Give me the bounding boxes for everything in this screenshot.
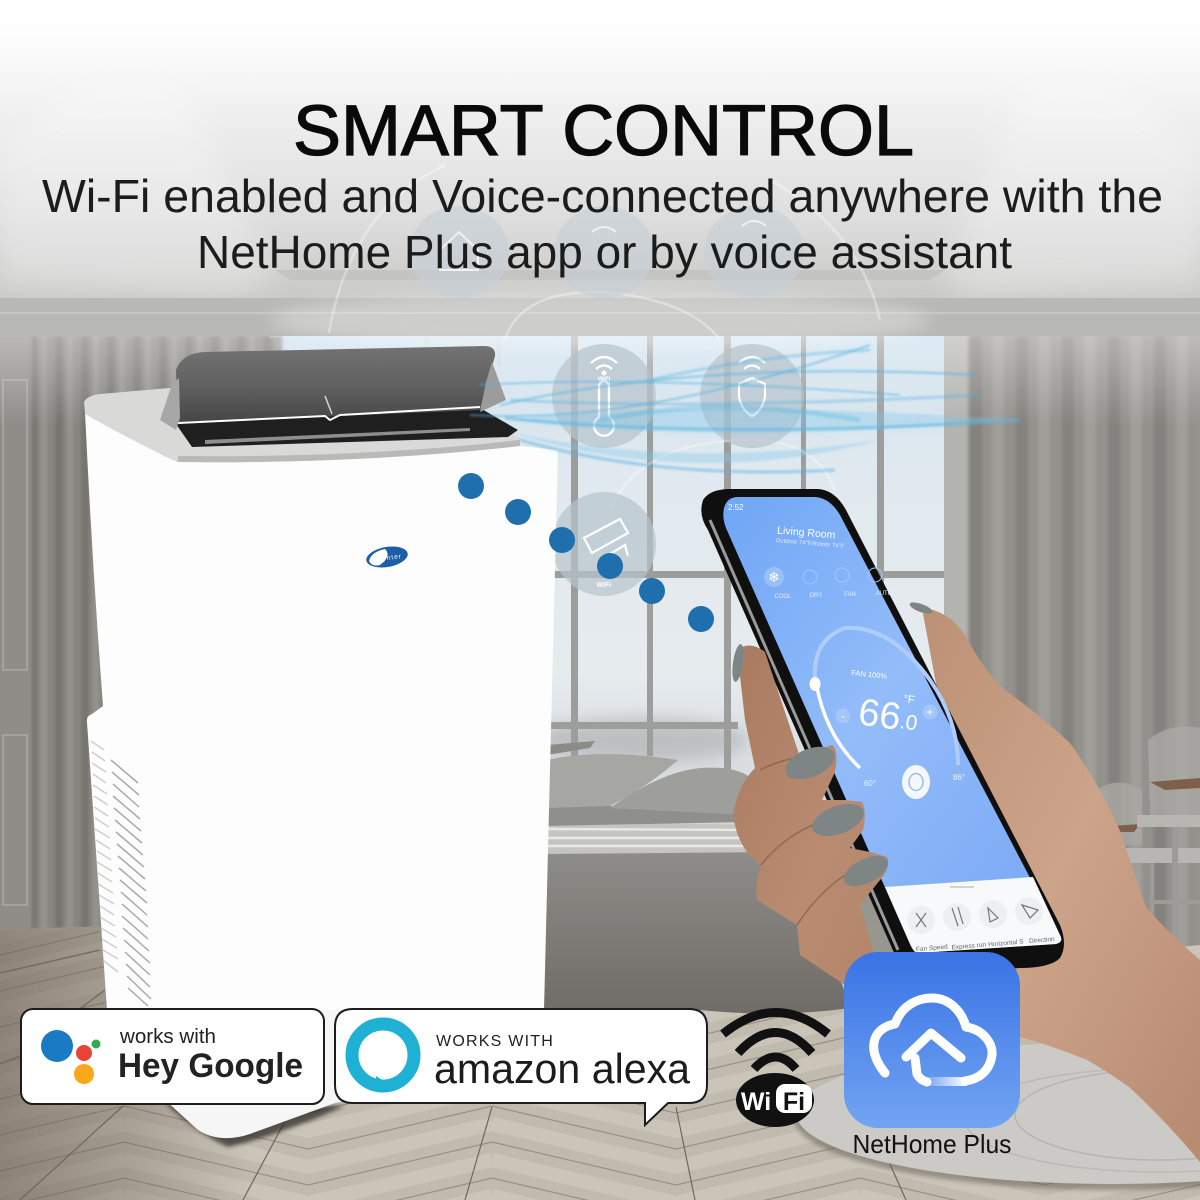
brand logo bbox=[365, 544, 409, 570]
front body with rear panel bbox=[85, 412, 558, 1010]
rug bbox=[794, 1042, 1200, 1190]
shadow bbox=[165, 1103, 345, 1147]
temperature dial: + bbox=[926, 705, 934, 719]
badge: amazon alexa: amazon alexa bbox=[434, 1045, 691, 1092]
subtitle: NetHome Plus app or by voice assistant bbox=[197, 226, 1012, 278]
smartphone bbox=[701, 489, 1064, 975]
app name label: NetHome Plus bbox=[852, 1129, 1012, 1159]
gripping fingers bbox=[733, 645, 888, 985]
power button bbox=[902, 765, 930, 799]
rear vent bbox=[91, 741, 151, 1006]
bottom tray: Horizontal S bbox=[988, 938, 1024, 949]
icon: wifi logo: Fi bbox=[783, 1088, 805, 1116]
fingers holding phone bbox=[730, 643, 893, 985]
translucent feature circles bbox=[329, 165, 880, 596]
temperature dial bbox=[810, 628, 965, 799]
temperature dial: 66 bbox=[856, 691, 903, 739]
cloud house glyph bbox=[874, 998, 992, 1082]
badge: hey google: works with bbox=[119, 1026, 216, 1048]
mode selector: COOL bbox=[774, 594, 792, 600]
icon: wifi thermometer: WiFi bbox=[598, 377, 611, 383]
bottom tray: Fan Speed bbox=[916, 944, 948, 953]
air flow wisps bbox=[470, 345, 1020, 472]
temperature dial: FAN 100% bbox=[851, 668, 888, 681]
nail ring bbox=[839, 850, 893, 892]
badge: hey google bbox=[21, 1009, 324, 1104]
mode selector: ❄ bbox=[768, 569, 780, 585]
connection dots bbox=[458, 473, 714, 632]
icon: wifi logo bbox=[723, 1012, 828, 1127]
subtitle bbox=[42, 170, 1163, 278]
bottom tray bbox=[885, 877, 1061, 953]
icon: google assistant dots bbox=[41, 1030, 100, 1084]
mode selector bbox=[764, 567, 893, 600]
temperature dial: 86° bbox=[953, 773, 965, 782]
mode selector: AUTO bbox=[876, 591, 893, 597]
screen status and title: Living Room bbox=[777, 524, 836, 542]
icon: wifi camera bbox=[552, 492, 656, 596]
hand back behind phone bbox=[900, 600, 1200, 1162]
bottom tray: Express run bbox=[951, 941, 987, 952]
phone edge highlight bbox=[710, 520, 898, 950]
window bbox=[270, 336, 970, 856]
icon: wifi shield bbox=[700, 344, 804, 448]
badge: amazon alexa: WORKS WITH bbox=[436, 1033, 554, 1050]
title: SMART CONTROL bbox=[293, 92, 914, 171]
left wall panel bbox=[0, 336, 34, 936]
floor bbox=[0, 925, 1200, 1200]
badge: hey google: Hey Google bbox=[118, 1047, 303, 1085]
screen status and title: 2:52 bbox=[728, 503, 744, 512]
subtitle: Wi-Fi enabled and Voice-connected anywhere with the bbox=[42, 170, 1163, 222]
dark vent tray bbox=[176, 408, 518, 447]
screen status and title bbox=[728, 503, 845, 550]
icon: wifi camera: WiFi bbox=[597, 582, 611, 589]
top rim bbox=[84, 388, 520, 462]
mode selector: FAN bbox=[844, 592, 856, 598]
left curtain bbox=[32, 336, 282, 929]
badge: amazon alexa bbox=[335, 1009, 707, 1125]
icon: wifi logo: Wi bbox=[741, 1088, 771, 1116]
faint upper icons bbox=[409, 206, 804, 298]
base foot bbox=[150, 1000, 540, 1138]
right curtain bbox=[968, 336, 1200, 956]
portable air conditioner bbox=[84, 346, 558, 1147]
temperature dial: - bbox=[841, 711, 845, 723]
screen status and title: Outdoor 74°F/Indoor 74°F bbox=[775, 538, 845, 550]
bed bbox=[538, 741, 850, 1014]
flap hinge right bbox=[480, 362, 506, 412]
nail middle bbox=[808, 798, 868, 842]
app icon: nethome plus bbox=[844, 952, 1020, 1128]
bottom tray: Direction bbox=[1029, 936, 1055, 945]
ceiling bbox=[0, 0, 1200, 426]
icon: wifi shield: WiFi bbox=[746, 379, 759, 385]
icon: wifi thermometer bbox=[552, 344, 656, 448]
flap hinge left bbox=[160, 378, 180, 430]
temperature dial: °F bbox=[903, 693, 916, 707]
mode selector: DRY bbox=[810, 593, 822, 599]
phone screen bbox=[723, 497, 1061, 953]
nail top bbox=[730, 643, 746, 683]
temperature dial: 60° bbox=[864, 779, 876, 788]
side table with jars bbox=[1097, 726, 1200, 953]
phone body bbox=[701, 489, 1064, 975]
icon: alexa ring bbox=[352, 1024, 414, 1092]
temperature dial: .0 bbox=[898, 710, 919, 735]
nail index bbox=[781, 740, 839, 786]
flap bbox=[176, 346, 495, 423]
brand logo: whynter bbox=[371, 553, 402, 564]
